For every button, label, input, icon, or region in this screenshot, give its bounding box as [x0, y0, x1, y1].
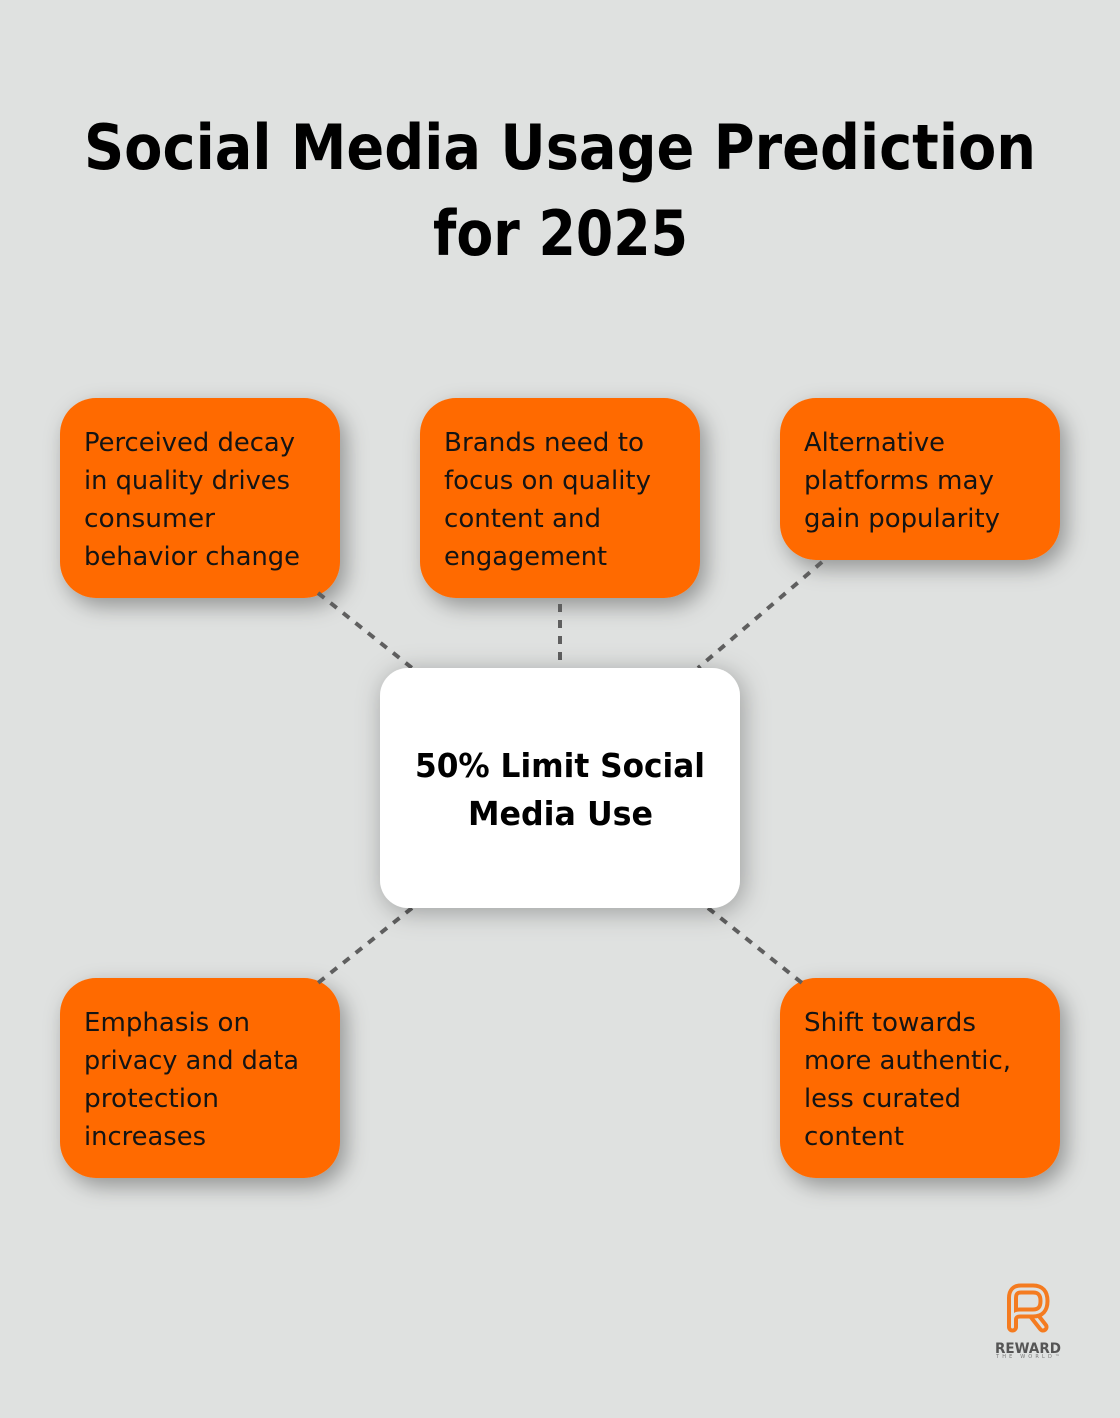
- logo: Reward the World: REWARD: [995, 1341, 1061, 1357]
- connector: top left: [318, 593, 412, 668]
- panel: alternative platforms: gain popularity: [804, 504, 1000, 534]
- panel: brands focus: Brands need to: [444, 428, 644, 458]
- panel: privacy: [60, 978, 340, 1178]
- panel: brands focus: content and: [444, 504, 601, 534]
- panel: authentic content: less curated: [804, 1084, 961, 1114]
- connector: bottom right: [708, 908, 802, 983]
- panel: authentic content: [780, 978, 1060, 1178]
- panel: authentic content: content: [804, 1122, 904, 1152]
- panel: alternative platforms: [780, 398, 1060, 560]
- panel: privacy: privacy and data: [84, 1046, 299, 1076]
- logo: Reward the World: [995, 1289, 1061, 1360]
- panel: perceived decay: Perceived decay: [84, 428, 295, 458]
- panel: authentic content: more authentic,: [804, 1046, 1011, 1076]
- connector: top centre: [558, 604, 562, 662]
- panel: central statistic: [380, 668, 740, 908]
- title: [84, 111, 1036, 270]
- panel: brands focus: [420, 398, 700, 598]
- panel: alternative platforms: Alternative: [804, 428, 945, 458]
- panel: central statistic: 50% Limit Social: [415, 746, 705, 785]
- connector: top right: [698, 562, 822, 668]
- connector: bottom left: [318, 908, 412, 983]
- panel: central statistic: Media Use: [468, 794, 653, 833]
- panel: privacy: protection: [84, 1084, 219, 1114]
- title: Social Media Usage Prediction: [84, 111, 1036, 184]
- panel: brands focus: focus on quality: [444, 466, 651, 496]
- panel: privacy: increases: [84, 1122, 206, 1152]
- panel: alternative platforms: platforms may: [804, 466, 994, 496]
- logo: Reward the World: THE WORLD™: [995, 1354, 1060, 1360]
- panel: perceived decay: behavior change: [84, 542, 300, 572]
- title: for 2025: [433, 197, 688, 270]
- panel: brands focus: engagement: [444, 542, 607, 572]
- panel: privacy: Emphasis on: [84, 1008, 250, 1038]
- panel: perceived decay: consumer: [84, 504, 216, 534]
- panel: authentic content: Shift towards: [804, 1008, 976, 1038]
- panel: perceived decay: [60, 398, 340, 598]
- panel: perceived decay: in quality drives: [84, 466, 290, 496]
